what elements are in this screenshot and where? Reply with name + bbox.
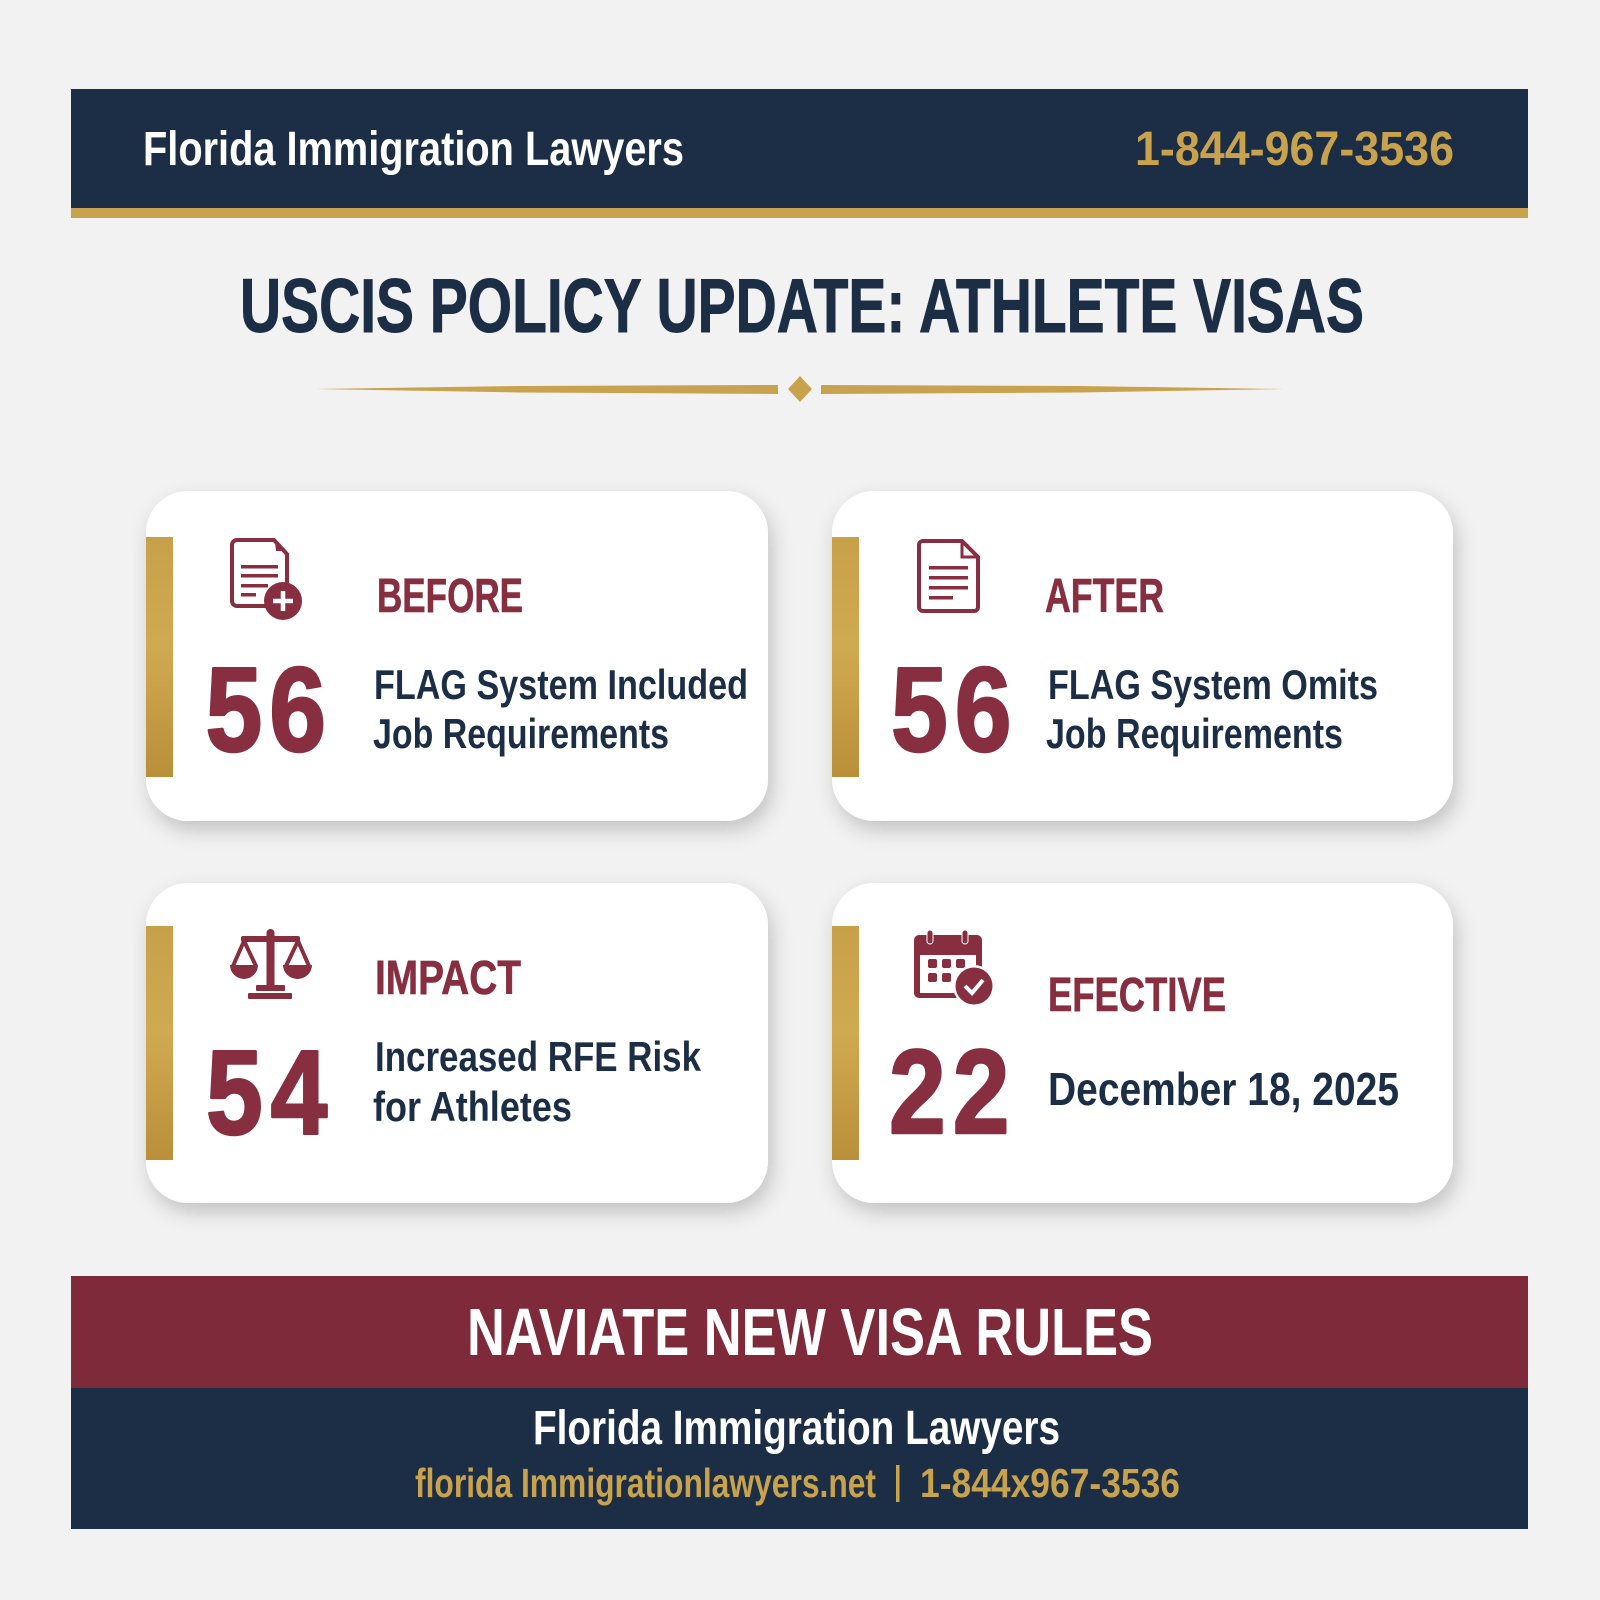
header phone number: 1-844-967-3536 bbox=[1135, 123, 1454, 176]
label: BEFORE bbox=[377, 570, 523, 623]
call to action heading: NAVIATE NEW VISA RULES bbox=[467, 1295, 1153, 1370]
description: FLAG System Included bbox=[374, 661, 748, 708]
label: IMPACT bbox=[375, 952, 521, 1005]
description bbox=[1046, 661, 1378, 757]
panel: after bbox=[832, 491, 1453, 821]
description bbox=[373, 1033, 702, 1130]
call to action banner bbox=[71, 1276, 1528, 1389]
title divider bbox=[316, 376, 1283, 402]
panel: impact bbox=[146, 883, 768, 1203]
description: Job Requirements bbox=[1046, 710, 1343, 757]
header firm name: Florida Immigration Lawyers bbox=[143, 123, 684, 176]
label: EFECTIVE bbox=[1048, 969, 1226, 1022]
panel: effective bbox=[832, 883, 1453, 1203]
label: AFTER bbox=[1045, 570, 1164, 623]
panel: before bbox=[146, 491, 768, 821]
icon: document bbox=[919, 541, 978, 611]
description: FLAG System Omits bbox=[1048, 661, 1378, 708]
stat number: 54 bbox=[206, 1025, 327, 1160]
stat number: 56 bbox=[891, 642, 1011, 777]
icon: scales of justice bbox=[230, 929, 312, 999]
footer panel bbox=[71, 1388, 1528, 1529]
icon: calendar with check bbox=[914, 930, 995, 1007]
description bbox=[373, 661, 748, 757]
description: December 18, 2025 bbox=[1048, 1063, 1399, 1115]
stat number: 56 bbox=[206, 642, 326, 777]
description: Increased RFE Risk bbox=[375, 1033, 702, 1080]
header banner bbox=[71, 89, 1528, 218]
description: for Athletes bbox=[373, 1083, 572, 1130]
footer firm name: Florida Immigration Lawyers bbox=[533, 1402, 1060, 1455]
icon: document with plus bbox=[232, 540, 302, 620]
description: Job Requirements bbox=[373, 710, 669, 757]
footer contact line: florida Immigrationlawyers.net bbox=[415, 1460, 876, 1506]
stat number: 22 bbox=[889, 1024, 1009, 1159]
footer contact line: 1-844x967-3536 bbox=[920, 1460, 1180, 1506]
